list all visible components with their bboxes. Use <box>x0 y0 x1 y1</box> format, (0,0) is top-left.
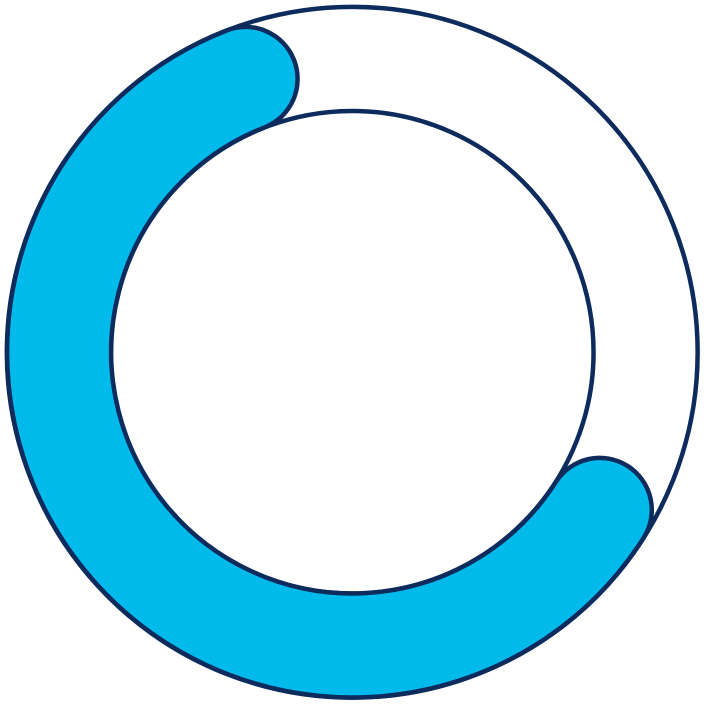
inner ring outline <box>111 111 594 594</box>
progress arc outline <box>59 79 600 645</box>
progress arc fill <box>59 79 600 645</box>
